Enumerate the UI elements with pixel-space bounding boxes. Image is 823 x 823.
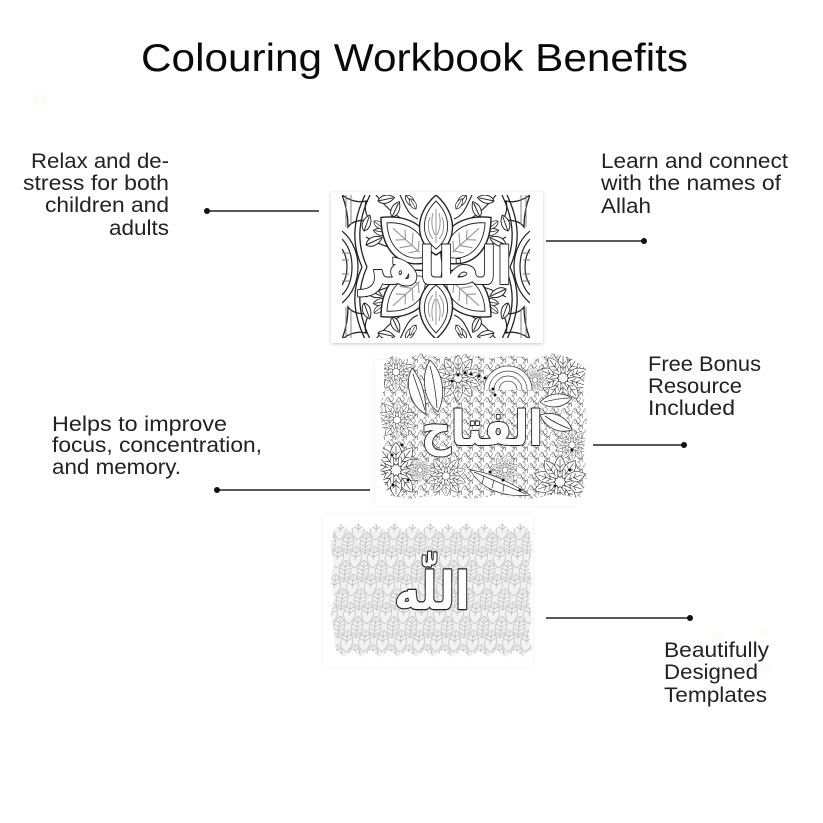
benefit text: relax and de-stress: [23, 150, 169, 240]
feather: [470, 470, 530, 496]
benefit text: focus and memory: [52, 413, 262, 479]
template card: leaves with Arabic name: [323, 514, 534, 667]
connector: first template to learn text: [546, 238, 647, 244]
template card: floral doodle with Arabic name: [368, 351, 589, 508]
connector: relax text to first template: [204, 208, 319, 214]
benefit text: relax and de-stress: adults: [109, 217, 169, 240]
Arabic name: Al-Zahir: الظاهر: [357, 237, 512, 297]
benefit text: learn and connect: [600, 150, 788, 218]
benefit text: focus and memory: and memory.: [52, 456, 181, 479]
benefit text: focus and memory: focus, concentration,: [52, 434, 262, 457]
benefit text: beautifully designed templates: Beautifully: [664, 639, 770, 662]
benefit text: focus and memory: Helps to improve: [52, 413, 227, 436]
benefit text: beautifully designed templates: Templates: [664, 684, 767, 707]
benefit text: learn and connect: Allah: [601, 195, 651, 218]
benefit text: beautifully designed templates: Designed: [664, 661, 758, 684]
benefit text: free bonus resource: Included: [648, 397, 735, 420]
benefit text: learn and connect: with the names of: [600, 172, 781, 195]
benefit text: free bonus resource: [648, 353, 761, 420]
connector: second template to free bonus text: [593, 442, 687, 448]
connector: third template to designed templates text: [546, 615, 693, 621]
large arch: [484, 366, 532, 390]
connector: focus text to second template: [214, 487, 370, 493]
benefit text: relax and de-stress: Relax and de-: [31, 150, 169, 173]
benefit text: relax and de-stress: children and: [45, 194, 169, 217]
benefit text: beautifully designed templates: [664, 639, 770, 707]
benefit text: free bonus resource: Resource: [648, 375, 742, 398]
benefit text: relax and de-stress: stress for both: [23, 172, 169, 195]
dots: [390, 372, 574, 492]
benefit text: free bonus resource: Free Bonus: [648, 353, 761, 376]
template card: mandala with Arabic name: [331, 192, 543, 343]
large leaves: [408, 360, 443, 414]
benefit text: learn and connect: Learn and connect: [601, 150, 788, 173]
Arabic name: Allah: اللّٰه: [394, 551, 470, 622]
title: Colouring Workbook Benefits: [141, 37, 688, 80]
Arabic name: Al-Fattah: الفتاح: [421, 400, 543, 457]
